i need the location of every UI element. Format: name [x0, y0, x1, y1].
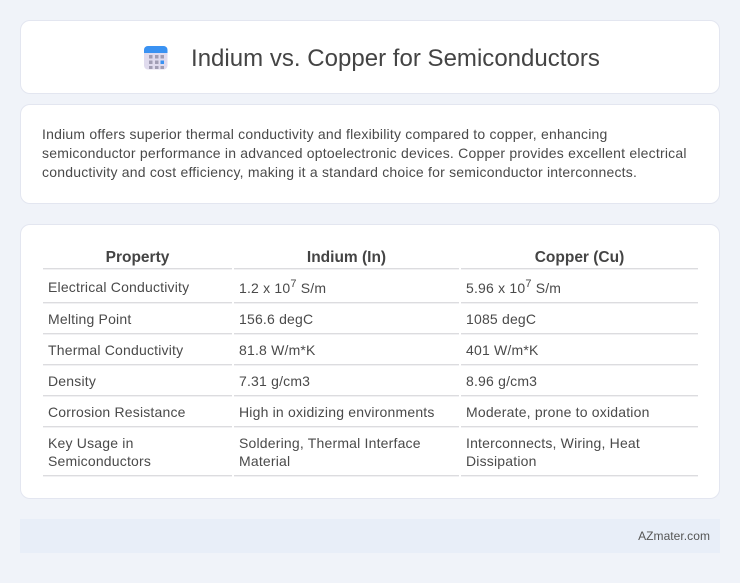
row: thermal conductivity — [48, 342, 539, 358]
row: thermal conductivity: 401 W/m*K — [466, 342, 539, 358]
row: density: 7.31 g/cm3 — [239, 373, 310, 389]
description text: conductivity and cost efficiency, making it a standard choice for semiconductor interconnects. — [42, 164, 637, 180]
row: electrical conductivity: 1.2 x 107 S/m — [239, 278, 326, 296]
row: key usage — [48, 435, 640, 469]
row: melting point: 156.6 degC — [239, 311, 313, 327]
row: corrosion resistance: High in oxidizing environments — [239, 404, 435, 420]
row: corrosion resistance — [48, 404, 650, 420]
row: density — [48, 373, 537, 389]
icon: calendar — [144, 46, 168, 70]
row: key usage: Semiconductors — [48, 453, 151, 469]
row: key usage: Material — [239, 453, 290, 469]
row: key usage: Dissipation — [466, 453, 537, 469]
table header row: Indium (In) — [307, 249, 386, 266]
panel: description — [20, 104, 720, 204]
row: density: 8.96 g/cm3 — [466, 373, 537, 389]
row: electrical conductivity: 5.96 x 107 S/m — [466, 278, 561, 296]
row: electrical conductivity — [48, 278, 561, 296]
row: melting point: Melting Point — [48, 311, 131, 327]
row: density: Density — [48, 373, 96, 389]
row: melting point — [48, 311, 536, 327]
row: key usage: Interconnects, Wiring, Heat — [466, 435, 640, 451]
description text: Indium offers superior thermal conductivity and flexibility compared to copper, enhancing — [42, 126, 608, 142]
row: corrosion resistance: Moderate, prone to oxidation — [466, 404, 650, 420]
title: Indium vs. Copper for Semiconductors — [191, 45, 600, 72]
panel: comparison table — [20, 224, 720, 499]
row: key usage: Soldering, Thermal Interface — [239, 435, 421, 451]
footer bar — [20, 519, 720, 553]
table header row: Property — [106, 249, 169, 266]
row: thermal conductivity: 81.8 W/m*K — [239, 342, 316, 358]
row: electrical conductivity: Electrical Conductivity — [48, 279, 189, 295]
row: key usage: Key Usage in — [48, 435, 134, 451]
description text: semiconductor performance in advanced optoelectronic devices. Copper provides excellent electrical — [42, 145, 687, 161]
row: melting point: 1085 degC — [466, 311, 536, 327]
description text — [42, 126, 687, 180]
row: corrosion resistance: Corrosion Resistance — [48, 404, 186, 420]
table header row — [106, 249, 624, 266]
table header row: Copper (Cu) — [535, 249, 624, 266]
row: thermal conductivity: Thermal Conductivity — [48, 342, 183, 358]
footer credit: AZmater.com — [638, 529, 710, 543]
header panel — [20, 20, 720, 94]
